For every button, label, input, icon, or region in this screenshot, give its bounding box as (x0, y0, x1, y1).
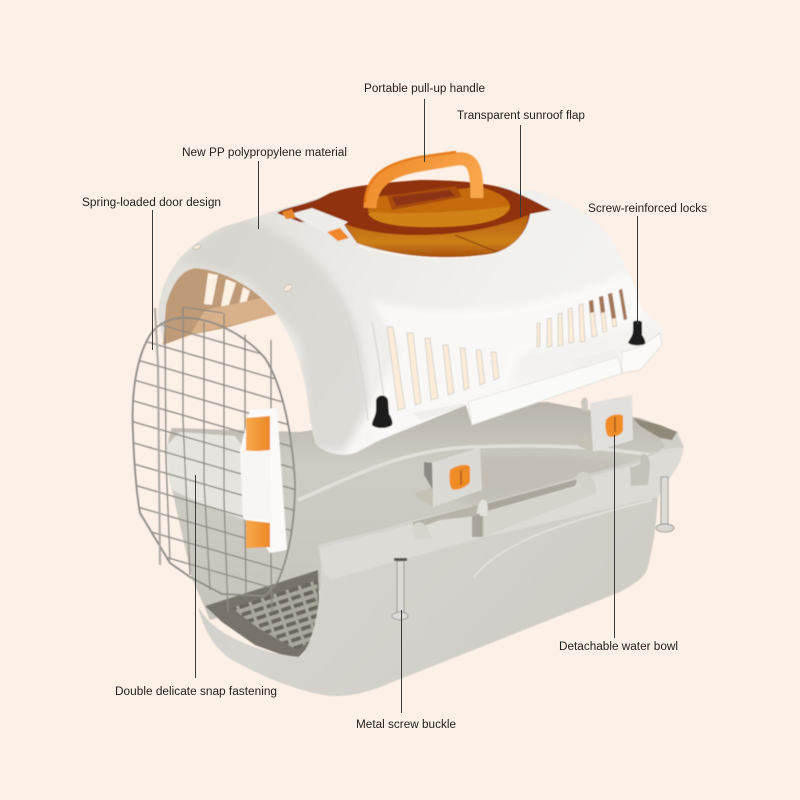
upper shell: shading (192, 220, 552, 451)
door spring latch (240, 408, 287, 553)
metal screw: front (392, 558, 408, 620)
base: floor tray and grate (205, 570, 320, 660)
base: rim flange and clips (412, 454, 650, 540)
leader lines (152, 99, 638, 713)
carrier interior seen through the door arch (163, 268, 282, 345)
portable pull-up handle (365, 152, 477, 208)
base: light rim band (320, 447, 684, 580)
metal screw: rear (656, 477, 674, 532)
label: spring-loaded door design: Spring-loaded door design (82, 197, 221, 209)
label: new PP polypropylene material: New PP polypropylene material (182, 147, 347, 159)
lid slide latch (282, 208, 349, 241)
screw-reinforced lock: left (372, 396, 392, 428)
base: outer front wall with rim (198, 418, 684, 696)
label: portable pull-up handle: Portable pull-up handle (364, 83, 485, 95)
upper shell: side vents, right group (537, 289, 627, 347)
illustration: pet carrier (120, 152, 684, 696)
label: transparent sunroof flap: Transparent sunroof flap (457, 110, 585, 122)
base: ribbed rear rim (633, 418, 677, 440)
detachable bowl behind the door (165, 432, 248, 520)
label: metal screw buckle: Metal screw buckle (356, 719, 456, 731)
base: wall moulding lines (474, 500, 652, 577)
detachable water bowl bracket: right (575, 395, 633, 452)
screw-reinforced lock: right (628, 320, 645, 345)
upper shell: lip step and latch boxes (346, 312, 662, 425)
base: interior of lower tray (168, 402, 678, 620)
upper shell: mounting holes (193, 243, 293, 293)
label: detachable water bowl: Detachable water bowl (559, 641, 678, 653)
upper shell: white dome (158, 183, 663, 455)
detachable water bowl bracket: left (415, 447, 482, 507)
base: curved back ridge (298, 446, 650, 500)
wire door (120, 307, 300, 612)
base: shading under the ridge (440, 454, 640, 505)
upper shell: side vents, left group (387, 327, 499, 410)
label: double delicate snap fastening: Double delicate snap fastening (115, 686, 277, 698)
label: screw-reinforced locks: Screw-reinforced locks (588, 203, 707, 215)
transparent sunroof lid (277, 180, 551, 258)
